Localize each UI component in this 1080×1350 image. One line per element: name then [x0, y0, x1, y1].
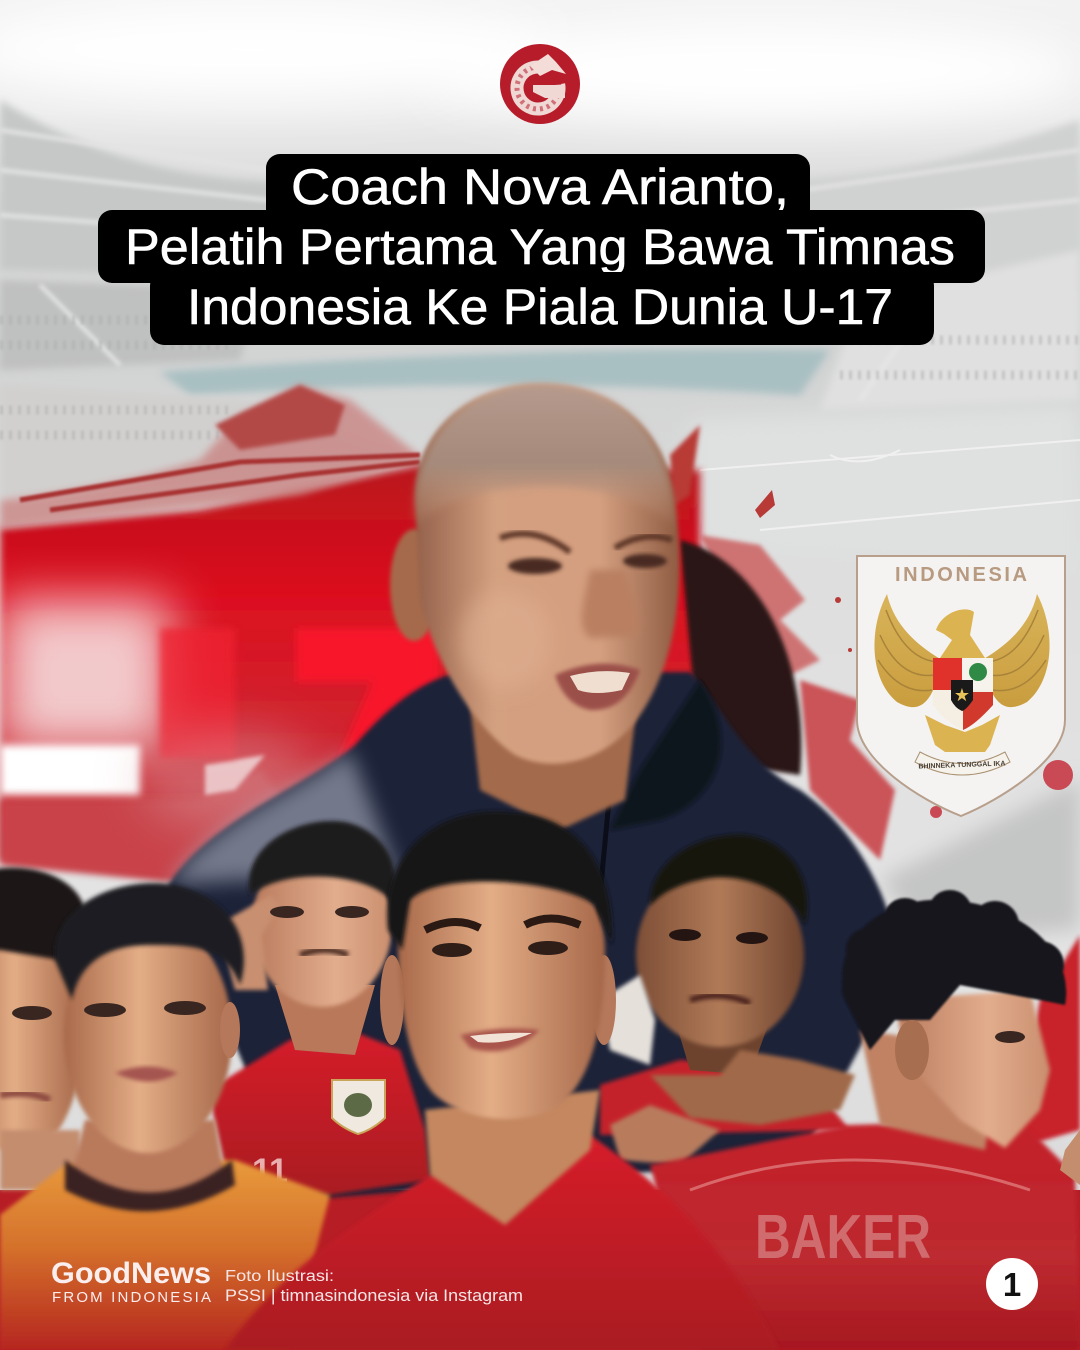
- page number: 1: [1003, 1266, 1021, 1303]
- player 1 far left: [0, 868, 86, 1190]
- hand gesture: [650, 1050, 855, 1125]
- red splatter right: [670, 425, 1080, 1150]
- coach: [168, 384, 892, 1200]
- orange jersey: [0, 1160, 330, 1350]
- jersey crest: [332, 1080, 385, 1134]
- title line 2: Pelatih Pertama Yang Bawa Timnas: [125, 219, 955, 275]
- player 4 center: [225, 811, 780, 1350]
- player 2 keeper: [0, 883, 330, 1350]
- jersey 3: [208, 1030, 430, 1195]
- red base behind players: [0, 1190, 1080, 1350]
- crest eagle head and body: [936, 609, 985, 658]
- logo emblem: [514, 64, 562, 112]
- indonesia crest: [857, 556, 1065, 816]
- crest label: INDONESIA: [895, 564, 1027, 586]
- saluting arm: [218, 895, 280, 990]
- center jersey: [225, 1135, 780, 1350]
- curly hair: [842, 890, 1066, 1050]
- photo credit: PSSI | timnasindonesia via Instagram: [225, 1286, 523, 1305]
- crest shield: ★: [954, 685, 970, 705]
- title line 2: [98, 210, 985, 283]
- right jersey: [650, 1120, 1080, 1350]
- jersey badge: [600, 975, 655, 1065]
- crest wings: [874, 594, 942, 707]
- jersey name: BAKER: [755, 1203, 931, 1272]
- player 6 right: [650, 890, 1080, 1350]
- crest shield: [933, 658, 993, 730]
- footer brand: [51, 1257, 211, 1306]
- number 17 ghost: [160, 628, 440, 800]
- coach jacket: [168, 672, 892, 1200]
- footer brand: GoodNews: [51, 1257, 211, 1290]
- photo credit: [225, 1268, 523, 1305]
- footer brand: FROM INDONESIA: [52, 1289, 211, 1306]
- player 5: [600, 835, 855, 1165]
- title line 3: [150, 272, 934, 345]
- photo credit: Foto Ilustrasi:: [225, 1268, 334, 1285]
- title line 1: [266, 154, 810, 224]
- title line 1: Coach Nova Arianto,: [291, 159, 789, 215]
- coach ear: [390, 529, 438, 641]
- player 3 saluting: [208, 821, 430, 1195]
- red brush band: [0, 385, 700, 900]
- coach head: [415, 384, 680, 764]
- crest ribbon: [915, 752, 1010, 775]
- coach neck: [465, 660, 640, 830]
- crest tail and feet: [925, 715, 1000, 752]
- jersey number: 11: [252, 1152, 288, 1190]
- indonesia crest: BHINNEKA TUNGGAL IKA: [918, 760, 1006, 771]
- page number: [986, 1258, 1038, 1310]
- title: [98, 154, 985, 345]
- title line 3: Indonesia Ke Piala Dunia U-17: [187, 279, 893, 335]
- coach features: [500, 534, 672, 710]
- logo badge: [500, 44, 580, 124]
